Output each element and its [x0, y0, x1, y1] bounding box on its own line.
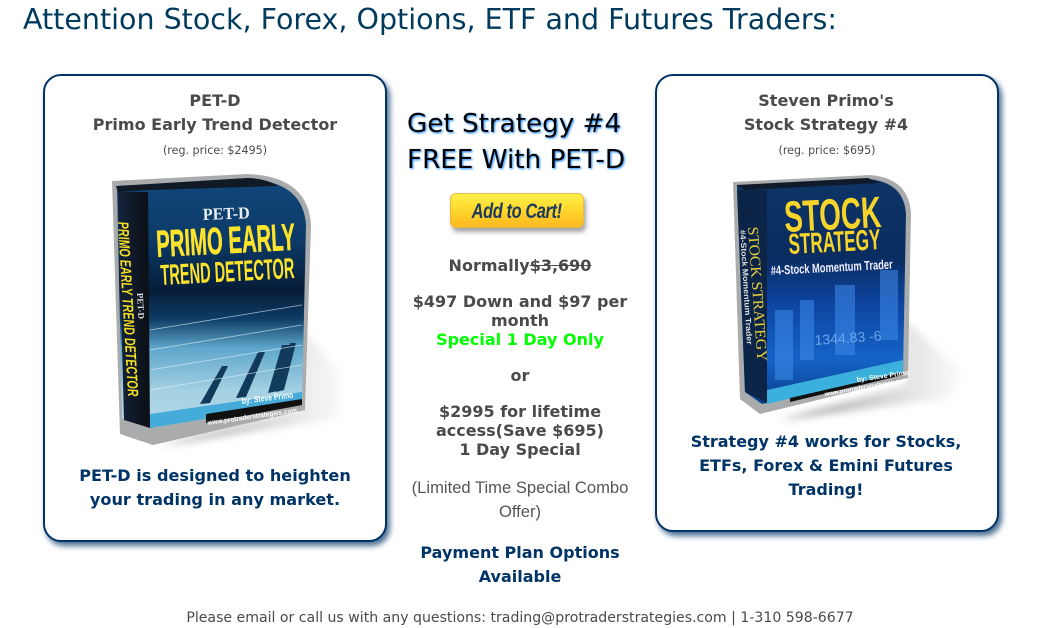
- heading: offer: [407, 109, 626, 175]
- normal price: Normally$3,690: [449, 256, 591, 275]
- PET-D description: [79, 466, 351, 509]
- Stock Strategy heading: [744, 91, 908, 134]
- panel: PET-D text block: PET-D: [189, 91, 241, 110]
- payment offer: Special 1 Day Only: [436, 330, 604, 349]
- icon: PET-D product box: PET-D: [202, 203, 250, 224]
- button: add to cart: [450, 193, 584, 228]
- PET-D description: your trading in any market.: [90, 490, 340, 509]
- icon: Stock Strategy product box: 1344.83 -6: [814, 327, 882, 348]
- limited time note: (Limited Time Special Combo: [412, 478, 628, 497]
- panel: PET-D text block: Primo Early Trend Detector: [93, 115, 337, 134]
- icon: Stock Strategy product box: #4-Stock Momentum Trader: [770, 257, 893, 278]
- Stock Strategy description: ETFs, Forex & Emini Futures: [699, 456, 953, 475]
- panel: PET-D: [43, 74, 387, 542]
- icon: PET-D product box: by: Steve Primo: [241, 390, 294, 406]
- payment plan note: Payment Plan Options: [420, 543, 620, 562]
- icon: Stock Strategy product box: STOCK: [783, 188, 883, 242]
- or: or: [511, 366, 529, 385]
- limited time note: [412, 478, 628, 521]
- heading: offer: Get Strategy #4: [407, 109, 621, 139]
- PET-D regular price: (reg. price: $2495): [163, 144, 267, 157]
- icon: PET-D product box: PRIMO EARLY: [155, 217, 296, 266]
- payment offer: [413, 292, 628, 349]
- payment offer: $497 Down and $97 per: [413, 292, 627, 311]
- heading: offer: FREE With PET-D: [407, 145, 625, 175]
- footer contact: Please email or call us with any questions: trading@protraderstrategies.com | 1-310 598-6677: [186, 610, 854, 626]
- payment plan note: Available: [479, 567, 561, 586]
- icon: Stock Strategy product box: by: Steve Primo: [856, 370, 910, 384]
- icon: Stock Strategy product box: STOCK STRATEGY: [744, 226, 769, 362]
- icon: PET-D product box: PRIMO EARLY TREND DETECTOR: [114, 221, 141, 397]
- payment offer: month: [491, 311, 549, 330]
- payment plan note: [420, 543, 620, 586]
- button: add to cart: Add to Cart!: [472, 200, 562, 223]
- lifetime offer: access(Save $695): [436, 421, 604, 440]
- icon: PET-D product box: TREND DETECTOR: [160, 253, 295, 292]
- title: Attention Stock, Forex, Options, ETF and Futures Traders:: [23, 3, 837, 36]
- PET-D description: PET-D is designed to heighten: [79, 466, 351, 485]
- Stock Strategy description: [691, 432, 961, 499]
- lifetime offer: [436, 402, 604, 459]
- Stock Strategy regular price: (reg. price: $695): [778, 144, 876, 157]
- Stock Strategy heading: Steven Primo's: [758, 91, 894, 110]
- lifetime offer: $2995 for lifetime: [439, 402, 601, 421]
- panel: Stock Strategy: [655, 74, 999, 532]
- icon: Stock Strategy product box: STRATEGY: [788, 224, 881, 261]
- lifetime offer: 1 Day Special: [459, 440, 581, 459]
- icon: Stock Strategy product box: www.protraderstrategies.com: [823, 377, 909, 398]
- panel: PET-D text block: [93, 91, 338, 134]
- Stock Strategy description: Trading!: [789, 480, 863, 499]
- Stock Strategy heading: Stock Strategy #4: [744, 115, 908, 134]
- icon: PET-D product box: www.protraderstrategies.com: [206, 408, 297, 427]
- icon: Stock Strategy product box: #4-Stock Momentum Trader: [738, 230, 754, 345]
- Stock Strategy description: Strategy #4 works for Stocks,: [691, 432, 961, 451]
- limited time note: Offer): [499, 502, 541, 521]
- icon: PET-D product box: PET-D: [135, 293, 146, 320]
